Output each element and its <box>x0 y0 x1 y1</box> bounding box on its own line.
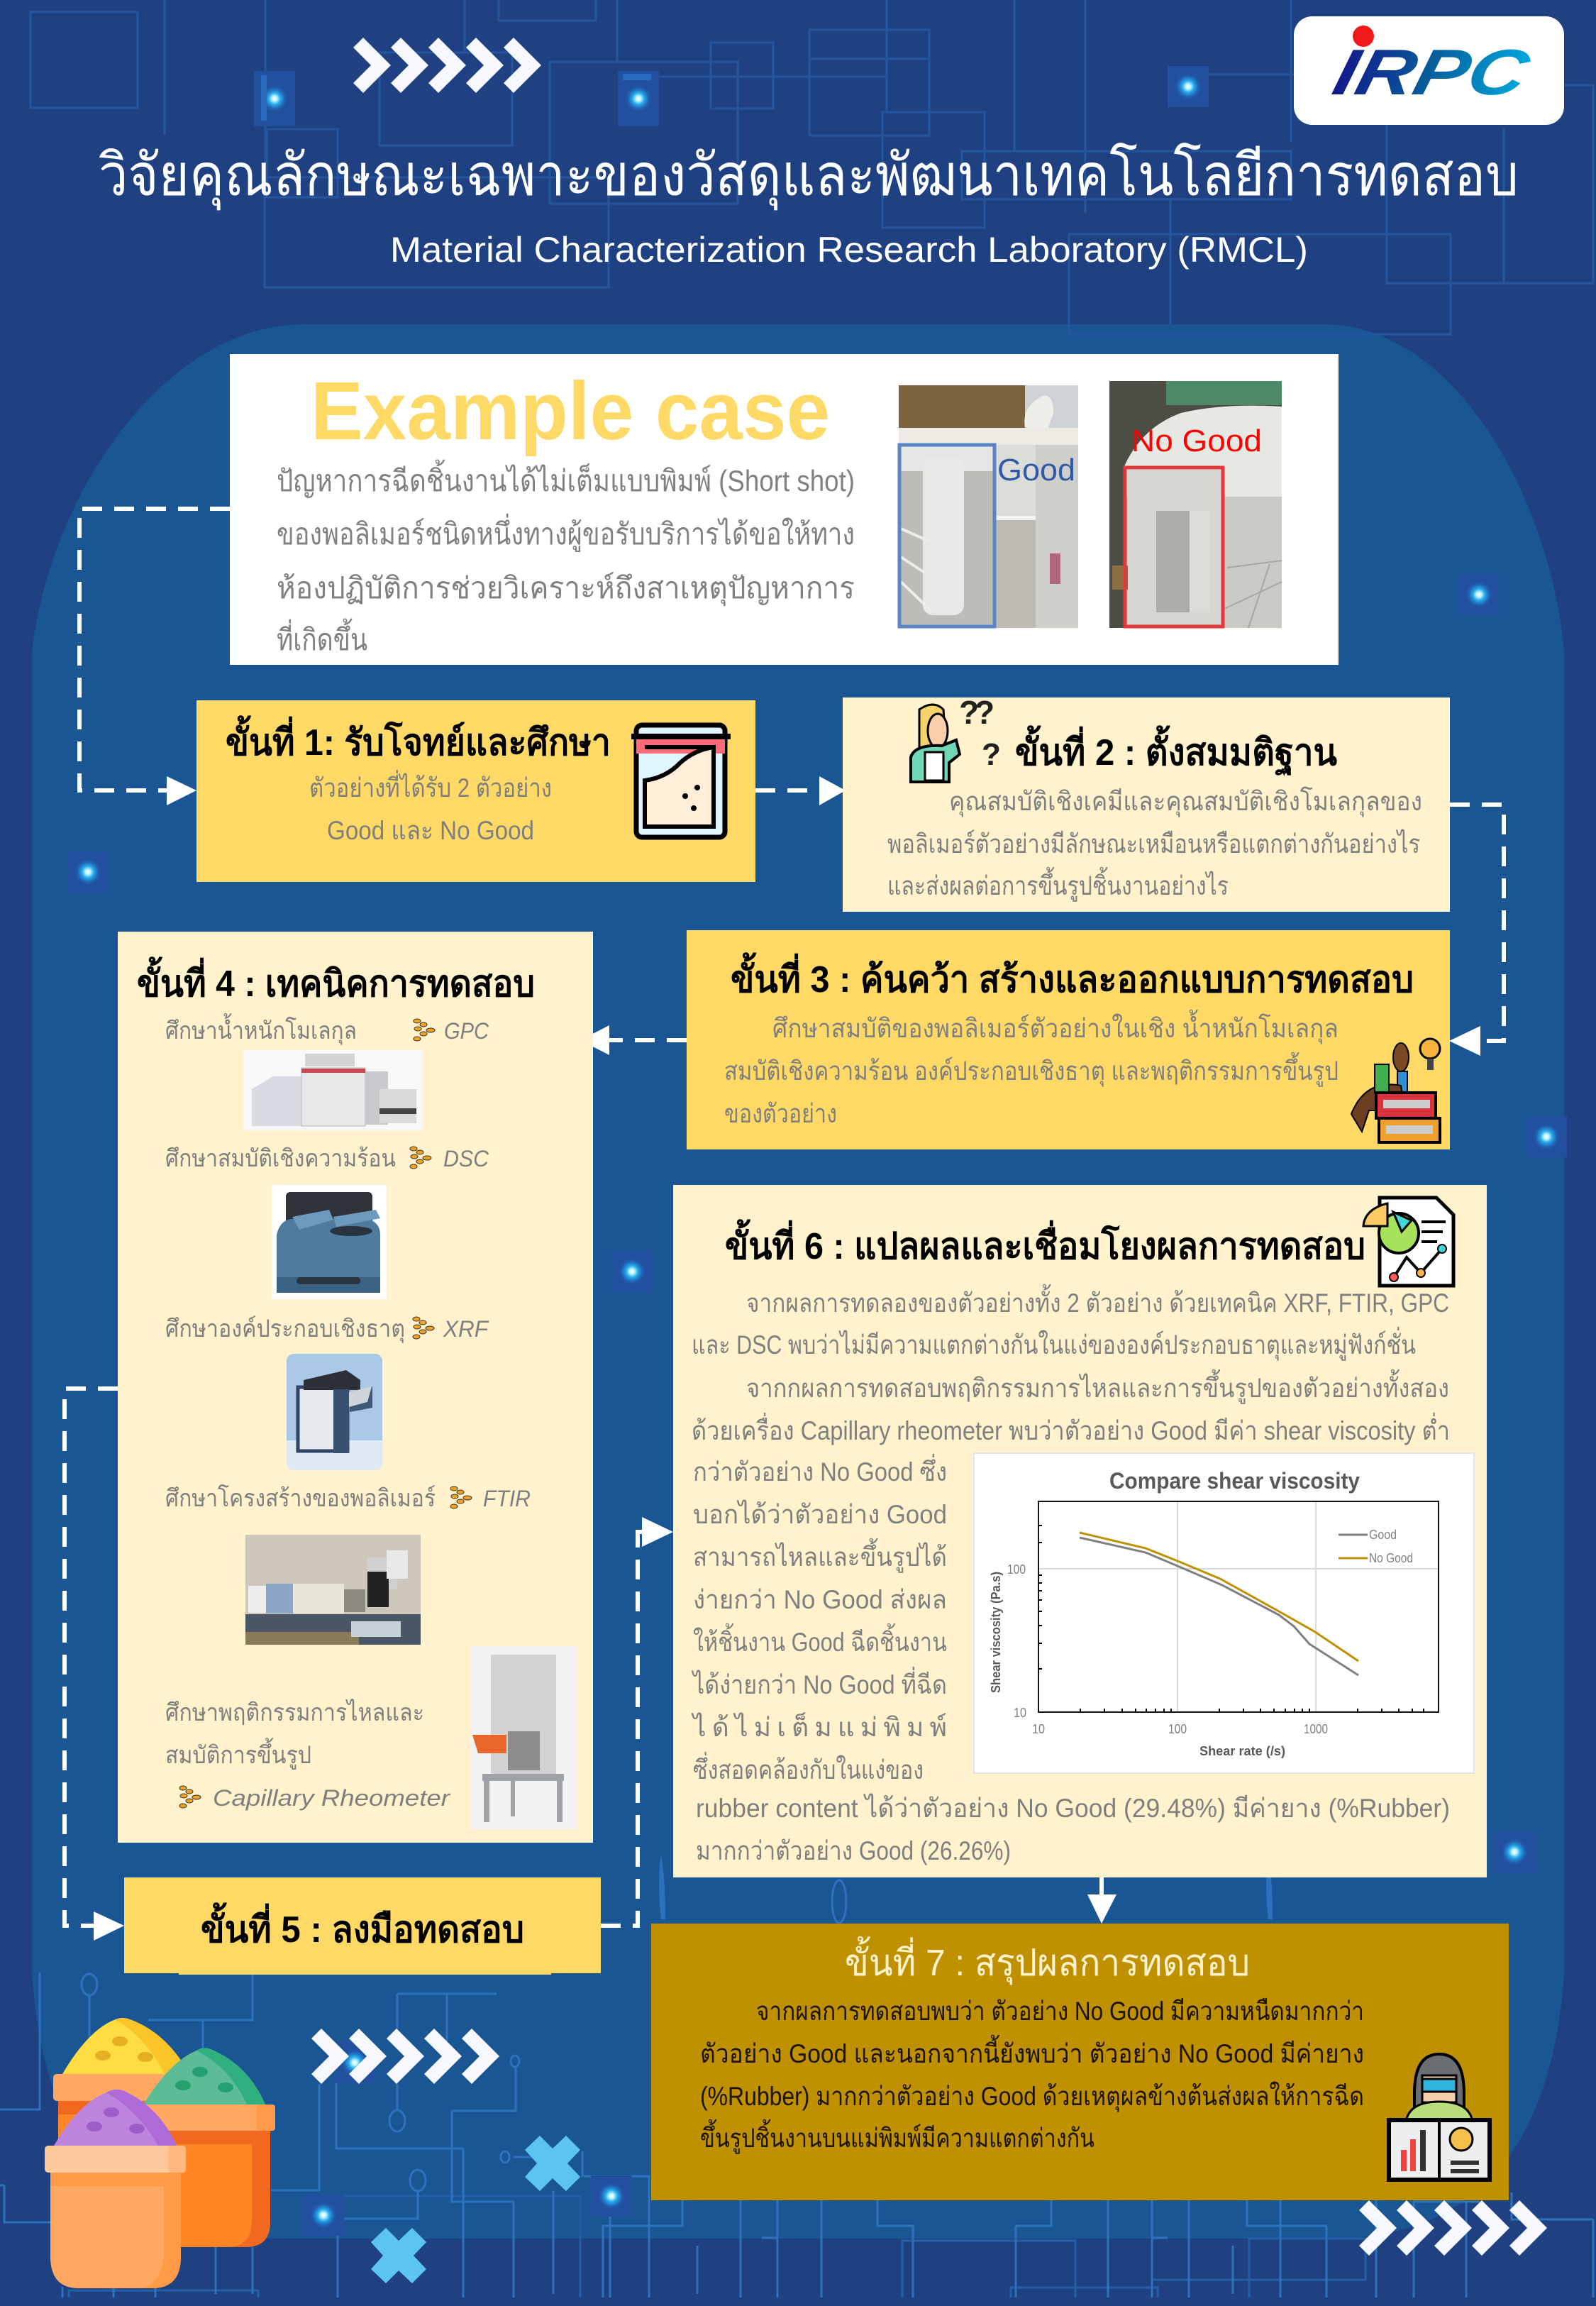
text block: step 6 wrap column: ได้ง่ายกว่า No Good ที่ฉีด <box>691 1666 947 1699</box>
cup: yellow <box>53 2018 195 2186</box>
icon: report with charts <box>1363 1198 1453 1286</box>
heading: step 4: ขั้นที่ 4 : เทคนิคการทดสอบ <box>137 956 535 1005</box>
illustration: spice cups <box>45 2018 275 2288</box>
legend <box>1339 1528 1413 1565</box>
logo: IRPC <box>1294 16 1564 125</box>
photo: DSC instrument <box>272 1185 387 1299</box>
legend: Good <box>1369 1528 1397 1542</box>
axis tick labels: 100 <box>1007 1562 1026 1577</box>
icon: thinking woman: ? <box>959 694 979 731</box>
heading: step 1: ขั้นที่ 1: รับโจทย์และศึกษา <box>226 715 611 763</box>
arrow: step 4 to step 5 <box>65 1389 124 1941</box>
subtitle: Material Characterization Research Laboratory (RMCL) <box>390 230 1308 270</box>
inner blue panel <box>32 324 1564 2239</box>
text block: step 2: คุณสมบัติเชิงเคมีและคุณสมบัติเชิงโมเลกุลของ <box>949 786 1422 817</box>
heading: step 3: ขั้นที่ 3 : ค้นคว้า สร้างและออกแบบการทดสอบ <box>731 952 1414 1000</box>
text block: step 6 closing: rubber content ได้ว่าตัวอย่าง No Good (29.48%) มีค่ายาง (%Rubber) <box>696 1793 1450 1823</box>
cup: green <box>143 2048 275 2247</box>
text block: problem description <box>277 459 855 656</box>
text block: step 7: (%Rubber) มากกว่าตัวอย่าง Good ด้วยเหตุผลข้างต้นส่งผลให้การฉีด <box>700 2081 1364 2112</box>
arrow: step 3 to step 4 <box>580 1025 687 1055</box>
axis tick labels: 10 <box>1032 1722 1045 1736</box>
text block: problem description: ของพอลิเมอร์ชนิดหนึ่งทางผู้ขอรับบริการได้ขอให้ทาง <box>277 514 855 552</box>
arrow: step 5 to step 6 <box>601 1517 673 1926</box>
label: Good: Good <box>997 453 1075 487</box>
chart title: Compare shear viscosity <box>1109 1468 1360 1494</box>
row: GPC: GPC <box>444 1018 489 1044</box>
panel: step 6 <box>673 1185 1487 1877</box>
row: GPC: ศึกษาน้ำหนักโมเลกุล <box>165 1013 357 1045</box>
panel: step 4 <box>118 932 593 1843</box>
text block: step 2: และส่งผลต่อการขึ้นรูปชิ้นงานอย่างไร <box>887 866 1229 902</box>
text block: step 3: ของตัวอย่าง <box>724 1099 837 1128</box>
text block: step 7: ขึ้นรูปชิ้นงานบนแม่พิมพ์มีความแตกต่างกัน <box>700 2119 1095 2154</box>
text block: step 6 wrap column: บอกได้ว่าตัวอย่าง Good <box>693 1499 947 1529</box>
chart: compare shear viscosity <box>974 1453 1474 1773</box>
heading: step 7: ขั้นที่ 7 : สรุปผลการทดสอบ <box>845 1936 1250 1985</box>
icon: sample jar <box>631 725 731 837</box>
text block: step 6 closing: มากกว่าตัวอย่าง Good (26.26%) <box>696 1836 1011 1865</box>
series: Good <box>1080 1538 1358 1675</box>
circuit pattern: upper right over panel <box>1069 234 1451 334</box>
photo: good sample <box>899 385 1078 628</box>
text block: step 6 wrap column: ซึ่งสอดคล้องกับในแง่ของ <box>693 1751 924 1784</box>
chevrons: bottom right <box>1359 2200 1547 2256</box>
text block: step 6 wrap column: กว่าตัวอย่าง No Good ซึ่ง <box>693 1453 947 1486</box>
y axis title: Shear viscosity (Pa.s) <box>989 1572 1003 1693</box>
panel: step 7 <box>651 1924 1509 2200</box>
text block: problem description: ที่เกิดขึ้น <box>277 618 367 656</box>
row: XRF: XRF <box>443 1316 489 1342</box>
panel: step 1 <box>196 700 755 882</box>
text block: step 6 intro <box>692 1284 1450 1445</box>
heading: step 5: ขั้นที่ 5 : ลงมือทดสอบ <box>201 1902 524 1951</box>
photo: no good sample <box>1109 381 1282 628</box>
photo: FTIR instrument <box>245 1535 421 1645</box>
text block: step 3: ศึกษาสมบัติของพอลิเมอร์ตัวอย่างในเชิง น้ำหนักโมเลกุล <box>772 1009 1339 1044</box>
series: No Good <box>1080 1533 1358 1661</box>
text block: step 7: จากผลการทดสอบพบว่า ตัวอย่าง No Good มีความหนืดมากกว่า <box>756 1997 1364 2026</box>
x axis title: Shear rate (/s) <box>1199 1744 1285 1758</box>
text block: step 6 closing <box>696 1793 1450 1865</box>
axis tick labels: 1000 <box>1304 1722 1328 1736</box>
row: capillary rheometer: ศึกษาพฤติกรรมการไหลและ <box>165 1699 424 1726</box>
arrow: example to step 1 <box>79 509 230 805</box>
circuit pattern: top <box>31 0 1593 326</box>
arrow: step 6 to step 7 <box>1087 1877 1116 1924</box>
icon: scientist with report <box>1389 2054 1490 2180</box>
icon: thinking woman: ? <box>975 694 994 731</box>
text block: problem description: ห้องปฏิบัติการช่วยวิเคราะห์ถึงสาเหตุปัญหาการ <box>277 571 855 607</box>
row: GPC <box>165 1013 489 1045</box>
chevrons: top <box>353 38 541 93</box>
circuit pattern: lower <box>0 1855 1593 2297</box>
icon: thinking woman: ? <box>982 737 1001 772</box>
row: FTIR: ศึกษาโครงสร้างของพอลิเมอร์ <box>165 1484 436 1512</box>
row: capillary rheometer: Capillary Rheometer <box>213 1785 451 1811</box>
panel: example case <box>230 354 1339 665</box>
text block: step 6 intro: และ DSC พบว่าไม่มีความแตกต่างกันในแง่ขององค์ประกอบธาตุและหมู่ฟังก์ชั่น <box>692 1326 1416 1361</box>
text block: problem description: ปัญหาการฉีดชิ้นงานได้ไม่เต็มแบบพิมพ์ (Short shot) <box>277 459 855 498</box>
chevrons: middle <box>311 2029 499 2084</box>
text block: step 6 wrap column: สามารถไหลและขึ้นรูปได้ <box>693 1538 947 1573</box>
text block: step 3: สมบัติเชิงความร้อน องค์ประกอบเชิงธาตุ และพฤติกรรมการขึ้นรูป <box>724 1052 1339 1087</box>
heading: step 2: ขั้นที่ 2 : ตั้งสมมติฐาน <box>1015 725 1337 776</box>
icon: cross marks <box>371 2136 580 2283</box>
panel: step 2 <box>843 694 1450 912</box>
legend: No Good <box>1369 1551 1413 1565</box>
text block: step 2: พอลิเมอร์ตัวอย่างมีลักษณะเหมือนหรือแตกต่างกันอย่างไร <box>887 829 1420 859</box>
text block: step 7: ตัวอย่าง Good และนอกจากนี้ยังพบว่า ตัวอย่าง No Good มีค่ายาง <box>700 2034 1364 2068</box>
text block: step 1: Good และ No Good <box>327 816 534 845</box>
panel: step 3 <box>687 930 1450 1149</box>
logo: IRPC: IRPC <box>1326 35 1537 109</box>
text block: step 6 wrap column: ได้ไม่เต็มแม่พิมพ์ <box>691 1711 947 1742</box>
arrow: step 2 to step 3 <box>1449 805 1504 1056</box>
cup: purple <box>45 2090 186 2288</box>
text block: step 6 intro: จากกผลการทดสอบพฤติกรรมการไหลและการขึ้นรูปของตัวอย่างทั้งสอง <box>746 1369 1449 1404</box>
text block: step 1: ตัวอย่างที่ได้รับ 2 ตัวอย่าง <box>309 769 552 802</box>
axis tick labels: 10 <box>1014 1706 1026 1720</box>
axis tick labels: 100 <box>1168 1722 1187 1736</box>
label: No Good: No Good <box>1131 424 1262 458</box>
text block: step 7 <box>700 1997 1364 2154</box>
heading: step 6: ขั้นที่ 6 : แปลผลและเชื่อมโยงผลการทดสอบ <box>725 1219 1365 1267</box>
photo: GPC instrument <box>243 1050 423 1130</box>
text block: step 6 intro: จากผลการทดลองของตัวอย่างทั้ง 2 ตัวอย่าง ด้วยเทคนิค XRF, FTIR, GPC <box>746 1284 1449 1318</box>
row: XRF: ศึกษาองค์ประกอบเชิงธาตุ <box>165 1315 405 1343</box>
text block: step 6 intro: ด้วยเครื่อง Capillary rheometer พบว่าตัวอย่าง Good มีค่า shear viscosity ต่ำ <box>692 1412 1450 1445</box>
axis tick labels <box>1007 1562 1328 1736</box>
text block: step 2 <box>887 786 1422 902</box>
row: capillary rheometer: สมบัติการขึ้นรูป <box>165 1738 311 1770</box>
row: DSC: DSC <box>443 1146 489 1171</box>
row: DSC: ศึกษาสมบัติเชิงความร้อน <box>165 1145 396 1172</box>
text block: step 6 wrap column <box>691 1453 947 1784</box>
icon: thinking woman <box>911 694 1001 782</box>
row: FTIR: FTIR <box>483 1486 531 1511</box>
row: capillary rheometer <box>165 1699 451 1811</box>
text block: step 6 wrap column: ให้ชิ้นงาน Good ฉีดชิ้นงาน <box>693 1623 947 1657</box>
arrow: step 1 to step 2 <box>755 776 846 805</box>
text block: step 1 <box>309 769 552 845</box>
photo: XRF instrument <box>287 1354 382 1470</box>
icon: reader with books and light bulb <box>1351 1039 1440 1142</box>
text block: step 3 <box>724 1009 1339 1128</box>
panel: step 5 <box>124 1877 601 1975</box>
photo: capillary rheometer <box>471 1646 577 1829</box>
text block: step 6 wrap column: ง่ายกว่า No Good ส่งผล <box>693 1585 947 1614</box>
heading: example case: Example case <box>311 365 830 457</box>
